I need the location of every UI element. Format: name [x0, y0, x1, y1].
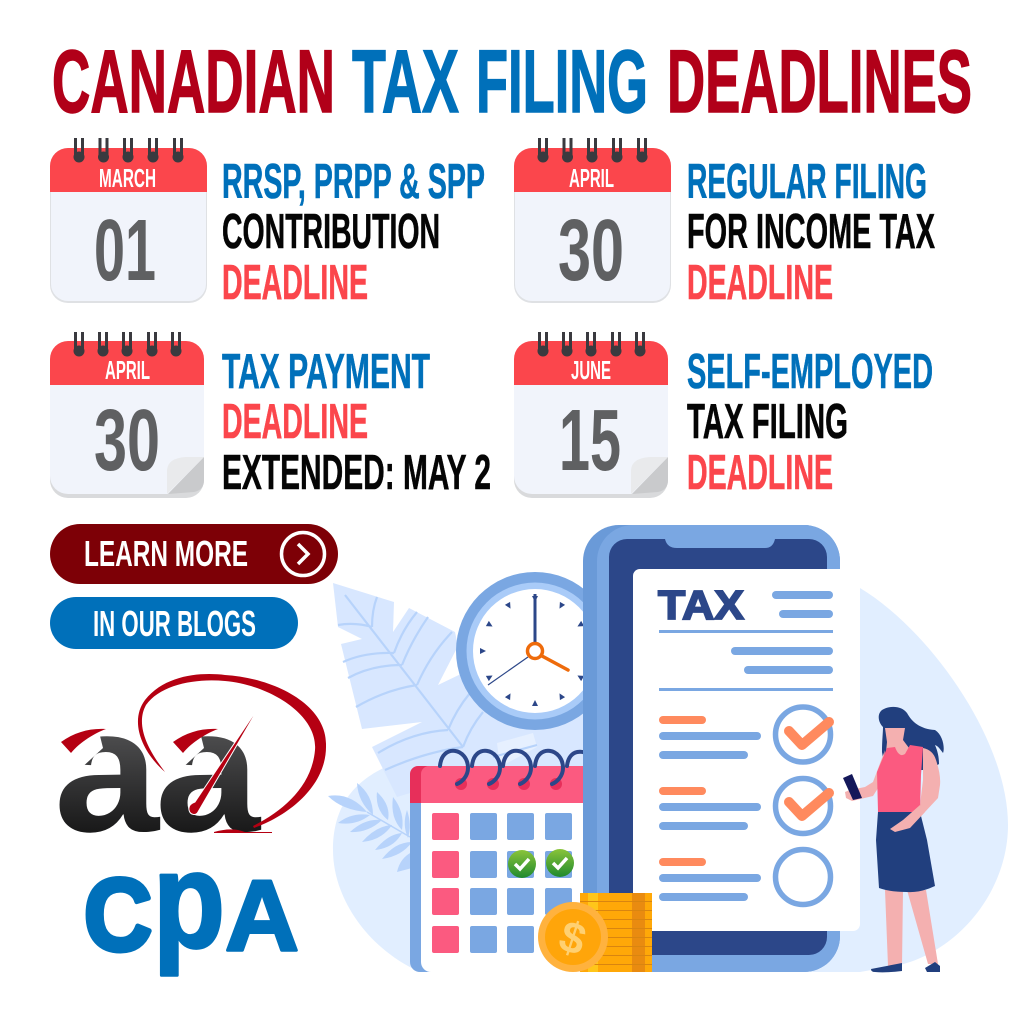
icon: wall calendar [410, 751, 595, 972]
logo: cpa: C [84, 858, 152, 972]
heading: tax: TAX [658, 582, 744, 628]
panel: april 30 regular filing [514, 138, 935, 310]
icon: coin stack: $ [553, 911, 592, 966]
icon: calendar april 30 [514, 138, 671, 303]
logo: cpa: A [225, 860, 299, 972]
text: tax payment deadline: EXTENDED: MAY 2 [222, 446, 491, 500]
icon: calendar april 30 with page curl [50, 332, 204, 498]
text: tax payment deadline: DEADLINE [222, 395, 368, 449]
icon: clock [456, 572, 614, 730]
text: rrsp contribution deadline [222, 155, 485, 310]
button: in our blogs [50, 597, 298, 649]
icon: calendar june 15 with page curl: 15 [559, 392, 621, 489]
text: regular filing deadline: DEADLINE [687, 256, 833, 310]
text: regular filing deadline [687, 155, 935, 310]
illustration background: pale blobs [333, 588, 1008, 972]
text: rrsp contribution deadline: DEADLINE [222, 256, 368, 310]
logo: cpa [84, 824, 299, 976]
button: learn more: LEARN MORE [84, 533, 248, 574]
icon: calendar june 15 with page curl [514, 332, 668, 498]
logo: aa: a [155, 673, 261, 869]
icon: calendar march 01: 01 [94, 202, 156, 299]
button: in our blogs: IN OUR BLOGS [93, 603, 256, 644]
icon: calendar april 30: APRIL [569, 163, 614, 193]
icon: calendar april 30 with page curl: APRIL [105, 355, 150, 385]
icon: small leaf sprig [328, 783, 412, 872]
text: rrsp contribution deadline: RRSP, PRPP & SPP [222, 155, 485, 209]
icon: calendar march 01 [50, 138, 207, 303]
button: learn more [50, 524, 338, 584]
illustration: leaves [328, 583, 590, 872]
logo: cpa: p [153, 824, 225, 976]
panel: march 01 deadline [50, 138, 485, 310]
panel: april 30 tax payment [50, 332, 491, 500]
text: self-employed tax filing deadline [687, 345, 933, 500]
text: tax payment deadline [222, 345, 491, 500]
title: TAX [352, 31, 459, 131]
text: self-employed tax filing deadline: TAX FILING [687, 395, 848, 449]
icon: coin stack [538, 893, 652, 972]
panel: june 15 self-employed [514, 332, 933, 500]
illustration: woman with phone [843, 707, 944, 972]
title: CANADIAN [52, 31, 335, 131]
icon: calendar march 01: MARCH [99, 163, 156, 193]
title [52, 31, 972, 131]
text: tax payment deadline: TAX PAYMENT [222, 345, 430, 399]
logo: aa: a [54, 673, 160, 869]
icon: smartphone [583, 525, 840, 972]
text: self-employed tax filing deadline: DEADLINE [687, 446, 833, 500]
logo: aa [54, 673, 326, 869]
panel: tax document [633, 569, 860, 931]
icon: calendar june 15 with page curl: JUNE [571, 355, 611, 385]
icon: calendar april 30 with page curl: 30 [94, 392, 160, 489]
title: FILING [476, 31, 648, 131]
text: rrsp contribution deadline: CONTRIBUTION [222, 205, 440, 259]
icon: calendar april 30: 30 [558, 202, 624, 299]
